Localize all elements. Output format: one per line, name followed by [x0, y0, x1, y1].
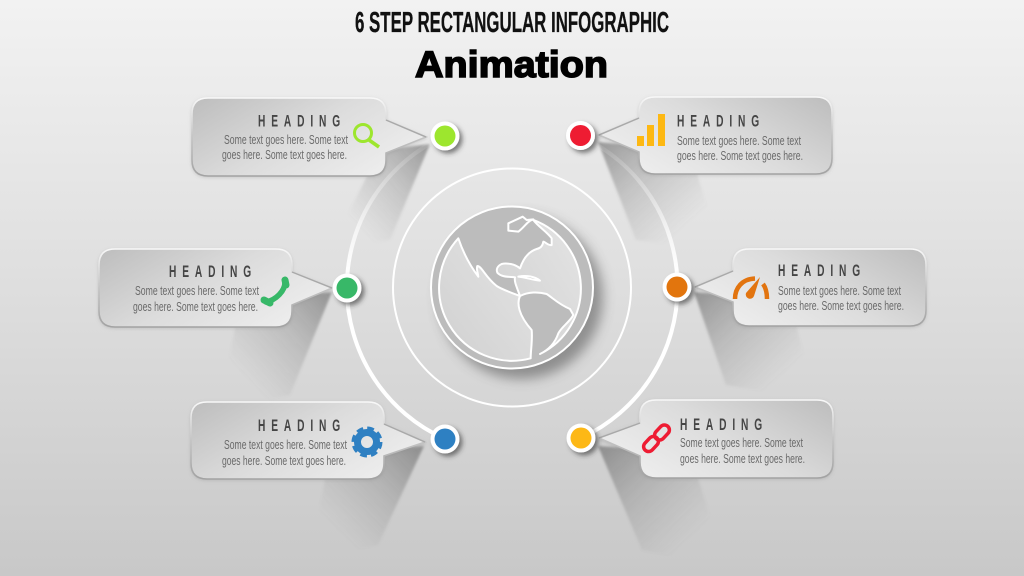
marker: orange dot [662, 272, 692, 302]
text block: goes here. Some text goes here. [680, 451, 805, 466]
text block: goes here. Some text goes here. [133, 299, 258, 314]
title: Animation [415, 44, 608, 85]
panel: bottom-right callout [599, 400, 833, 478]
icon: magnifier [354, 124, 379, 147]
text block: goes here. Some text goes here. [677, 148, 803, 163]
heading: HEADING [258, 415, 340, 435]
outer ring [393, 168, 631, 406]
marker: green dot [332, 274, 362, 302]
icon: chain link [642, 423, 671, 454]
text block: Some text goes here. Some text [677, 133, 801, 148]
icon: gauge [735, 277, 767, 299]
marker: yellow dot [566, 424, 596, 452]
icon: bar chart [637, 114, 665, 146]
panel: middle-right callout [695, 249, 926, 326]
text block [677, 133, 803, 163]
heading: HEADING [680, 414, 762, 434]
text block: goes here. Some text goes here. [222, 147, 347, 162]
icon: gear [354, 428, 380, 456]
heading: HEADING [778, 260, 860, 280]
marker: blue dot [430, 424, 460, 454]
panel: top-left callout [192, 98, 426, 176]
text block [222, 437, 347, 468]
panel: bottom-left callout [191, 402, 425, 479]
text block: goes here. Some text goes here. [778, 298, 904, 313]
marker: red dot [566, 121, 595, 150]
heading: HEADING [169, 261, 251, 281]
panel: middle-left callout [99, 249, 332, 327]
title: 6 STEP RECTANGULAR INFOGRAPHIC [355, 7, 669, 39]
panel: top-right callout [599, 97, 832, 174]
title [355, 7, 669, 85]
text block [222, 132, 348, 162]
long shadows behind callouts [220, 142, 815, 565]
text block: Some text goes here. Some text [135, 283, 259, 298]
text block: Some text goes here. Some text [224, 132, 348, 147]
heading: HEADING [258, 111, 340, 130]
icon: phone [264, 280, 286, 303]
marker: green-yellow dot [430, 122, 460, 150]
icon: globe [431, 206, 603, 379]
text block: Some text goes here. Some text [224, 437, 347, 452]
main arcs [347, 136, 678, 439]
text block [680, 435, 805, 466]
text block [133, 283, 259, 314]
text block: Some text goes here. Some text [778, 283, 901, 298]
text block [778, 283, 904, 313]
heading: HEADING [677, 111, 759, 130]
text block: goes here. Some text goes here. [222, 453, 346, 468]
text block: Some text goes here. Some text [680, 435, 803, 450]
